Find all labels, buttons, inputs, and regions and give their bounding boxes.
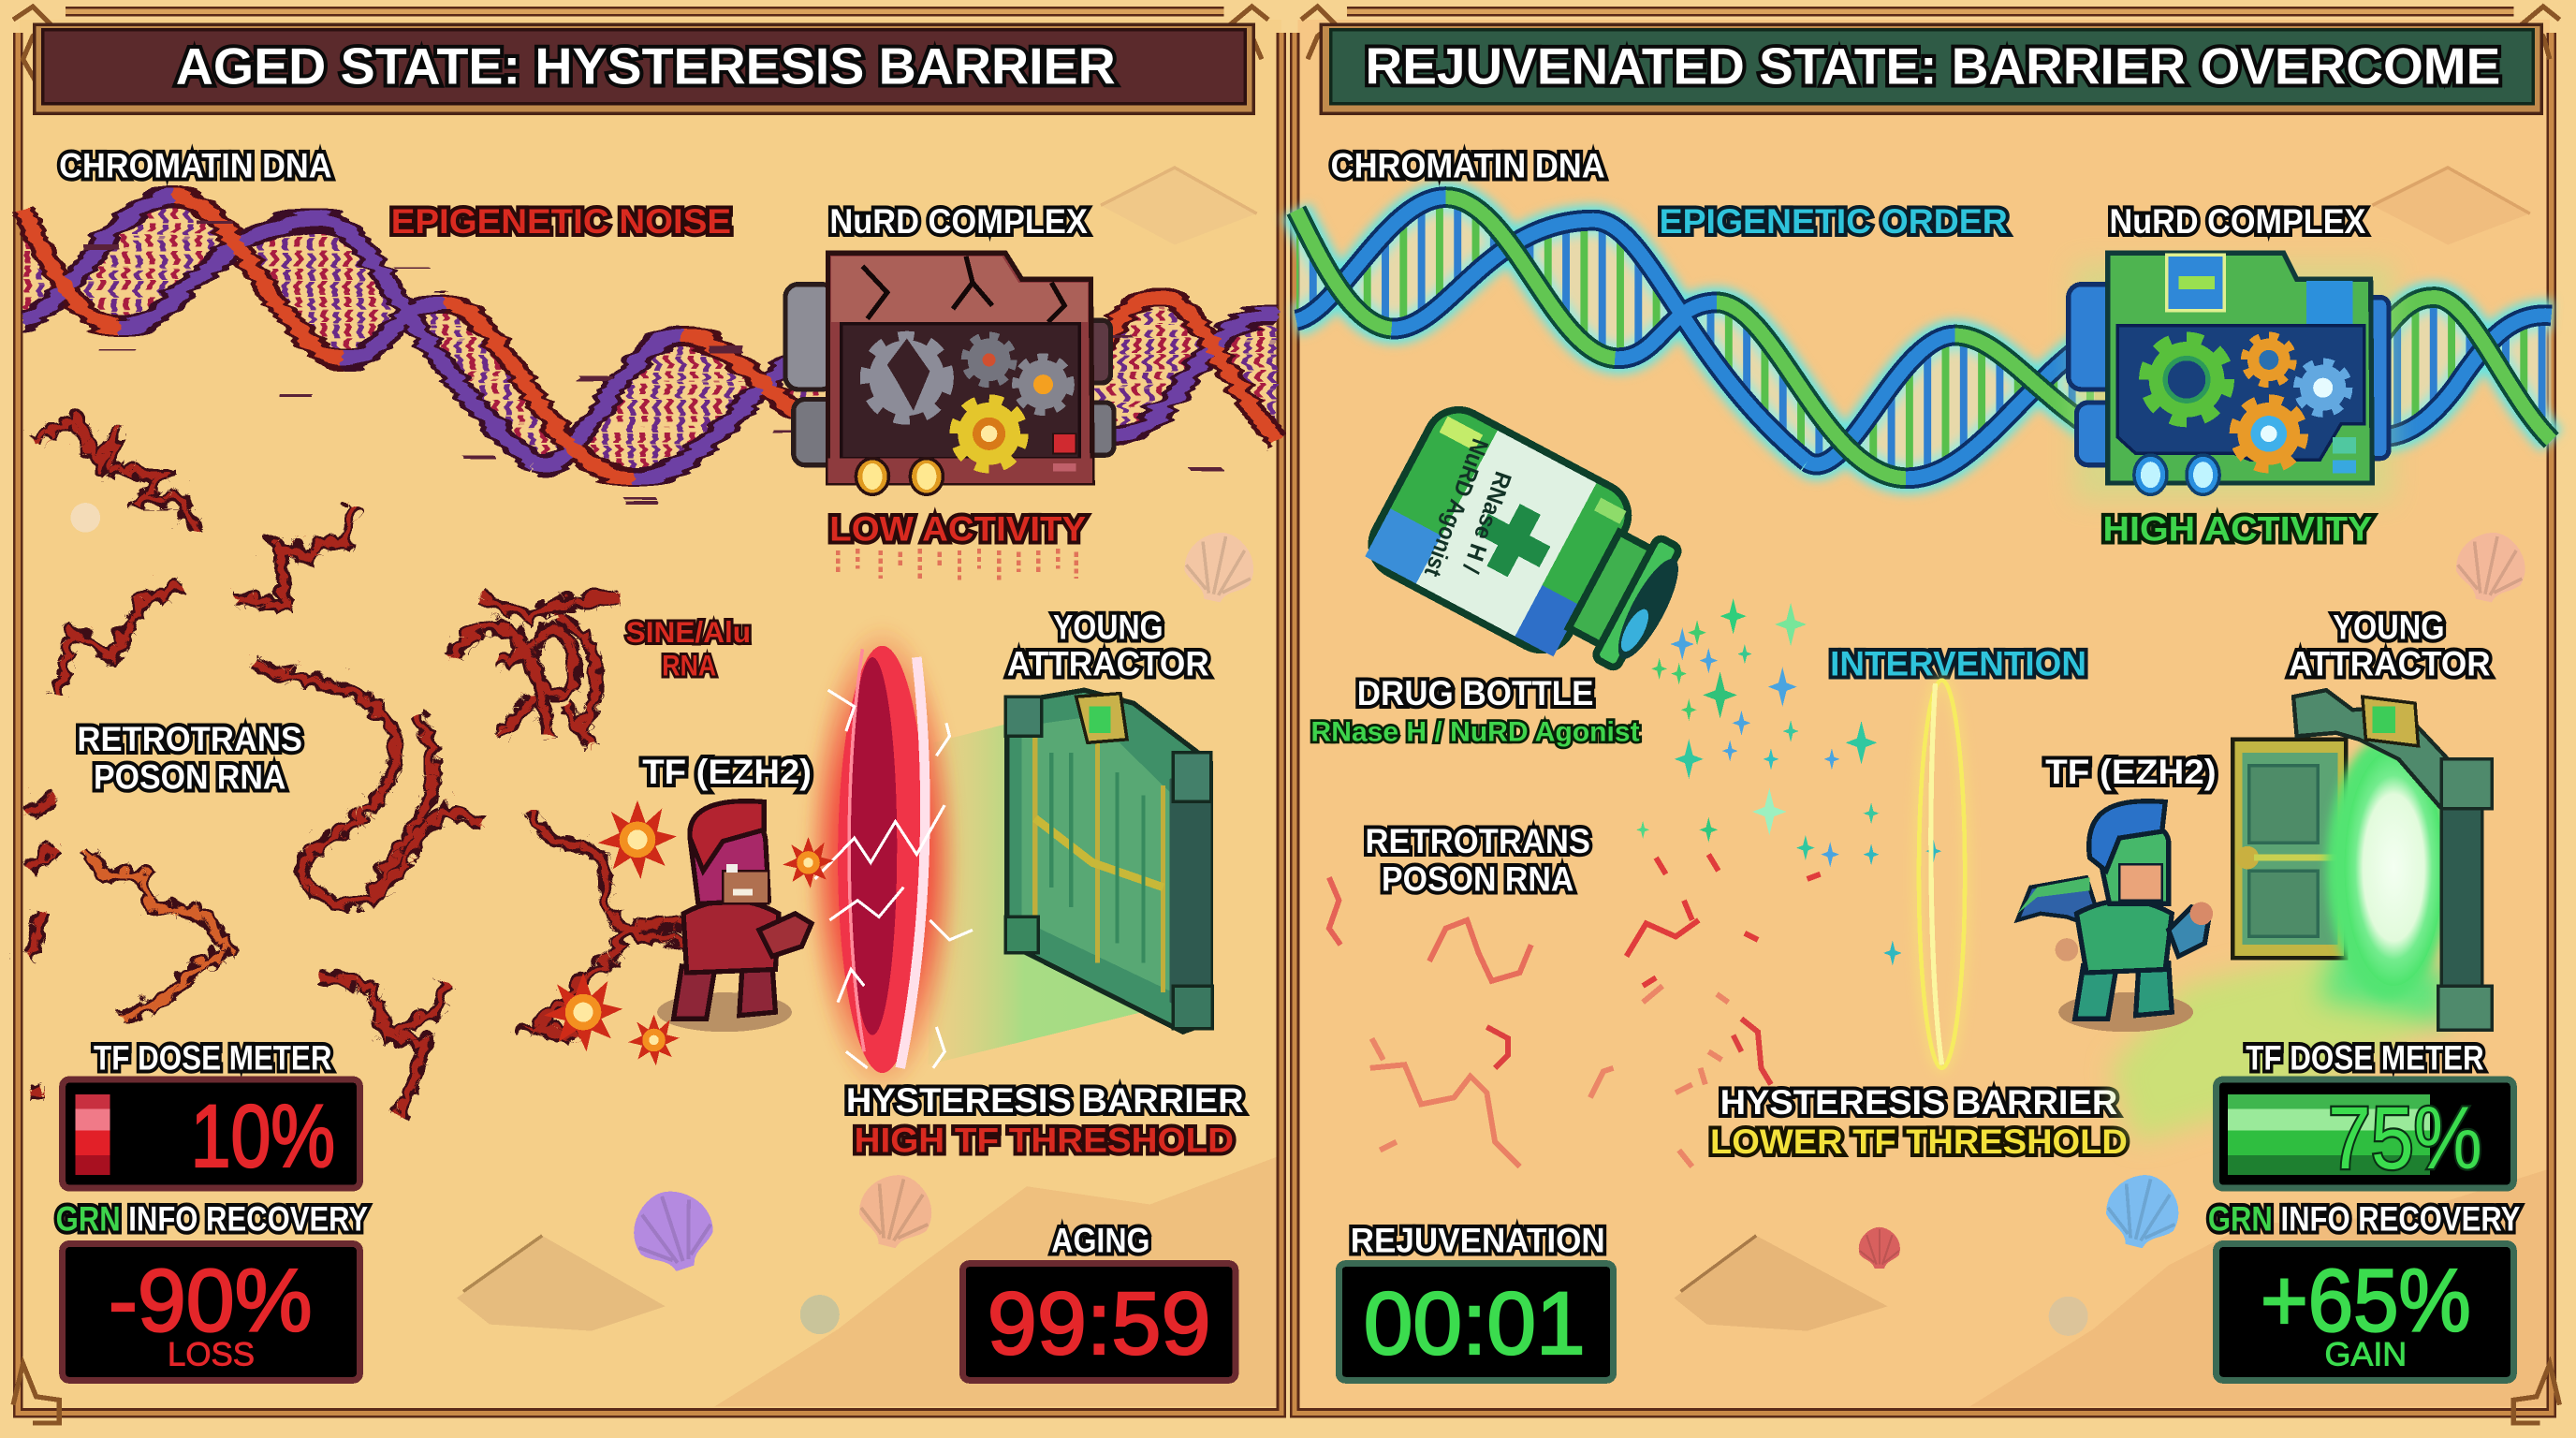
chart: rejuvenated chromatin DNA helix <box>1296 198 2552 478</box>
icon: fading RNA fragments <box>1329 855 1821 1167</box>
label: young attractor rejuvenated: YOUNG <box>2333 609 2445 647</box>
drips under label <box>838 549 1076 581</box>
label: hysteresis barrier rejuvenated <box>1710 1083 2128 1161</box>
gear: orange core <box>2236 401 2302 466</box>
label: drug bottle <box>1311 674 1640 748</box>
timer: rejuvenation 00:01 <box>1339 1264 1614 1380</box>
label: aging: AGING <box>1051 1221 1150 1259</box>
arch <box>2293 690 2448 809</box>
heading: aged state: AGED STATE: HYSTERESIS BARRIER <box>176 38 1116 95</box>
label: high activity: HIGH ACTIVITY <box>2103 509 2372 548</box>
gauge: GRN loss: -90% <box>109 1252 312 1351</box>
label: retrotransposon RNA rejuvenated <box>1365 822 1590 898</box>
label: young attractor aged: YOUNG <box>1053 609 1164 647</box>
sand shading lower right <box>1969 1168 2552 1406</box>
label: GRN info recovery aged: GRN INFO RECOVERY <box>56 1200 368 1239</box>
label: retrotransposon RNA aged: RETROTRANS <box>77 720 302 758</box>
label: chromatin DNA aged: CHROMATIN DNA <box>59 147 332 185</box>
label: bottle text <box>1419 435 1516 580</box>
gauge: TF dose 75 percent <box>2217 1079 2513 1188</box>
timer: aging 99:59: 99:59 <box>988 1274 1211 1373</box>
icon: healthy NuRD machine <box>2069 253 2393 501</box>
label: SINE/Alu RNA: RNA <box>662 648 716 682</box>
lamps <box>2134 455 2167 494</box>
gear: small <box>966 337 1012 383</box>
door leaf <box>2232 740 2346 958</box>
label: retrotransposon RNA aged <box>77 720 302 796</box>
dune: bottom <box>1674 1236 1888 1331</box>
icon: drug bottle <box>1360 399 1705 697</box>
gauge: GRN gain: +65% <box>2261 1252 2471 1351</box>
label: young attractor aged <box>1007 609 1209 682</box>
label: NuRD complex aged: NuRD COMPLEX <box>829 202 1088 241</box>
icon: intervention sparkles <box>1636 598 1941 965</box>
portal glow <box>2326 736 2452 999</box>
label: SINE/Alu RNA: SINE/Alu <box>626 615 751 649</box>
label: retrotransposon RNA aged: POSON RNA <box>94 757 285 796</box>
label: epigenetic order: EPIGENETIC ORDER <box>1660 202 2008 241</box>
heading: rejuvenated state: REJUVENATED STATE: BARRIER OVERCOME <box>1365 38 2500 95</box>
label: GRN info recovery rejuvenated: GRN INFO RECOVERY <box>2208 1200 2520 1239</box>
gauge: TF dose 75 percent: 75% <box>2328 1089 2482 1188</box>
panel: aged state background <box>0 0 1292 1438</box>
icon: hysteresis barrier yellow <box>1917 681 1967 1068</box>
label: hysteresis barrier rejuvenated: LOWER TF THRESHOLD <box>1710 1123 2128 1161</box>
label: TF dose meter rejuvenated: TF DOSE METER <box>2246 1039 2484 1078</box>
label: TF EZH2 aged: TF (EZH2) <box>642 753 812 791</box>
label: young attractor rejuvenated <box>2289 609 2491 682</box>
label: intervention: INTERVENTION <box>1830 644 2086 682</box>
dune: top right <box>1101 168 1257 245</box>
gear: glowing core <box>1017 359 1070 411</box>
gear: blue <box>2298 363 2348 413</box>
label: hysteresis barrier aged: HIGH TF THRESHOLD <box>855 1121 1234 1159</box>
label: SINE/Alu RNA <box>626 615 751 682</box>
glitch fragments <box>82 222 1224 501</box>
gauge: GRN gain <box>2217 1244 2513 1380</box>
label: bottle text: NuRD Agonist <box>1419 435 1493 580</box>
icon: closed young attractor door <box>1005 690 1212 1032</box>
timer: aging 99:59 <box>962 1264 1236 1380</box>
gear: orange small <box>2246 337 2291 383</box>
timer: rejuvenation 00:01: 00:01 <box>1364 1274 1586 1373</box>
gear: yellow <box>956 401 1022 466</box>
icon: aged TF warrior <box>657 801 812 1032</box>
label: chromatin DNA rejuvenated: CHROMATIN DNA <box>1331 147 1605 185</box>
label: retrotransposon RNA rejuvenated: RETROTRANS <box>1365 822 1590 860</box>
icon: rejuvenated TF warrior <box>2017 801 2213 1032</box>
label: drug bottle: DRUG BOTTLE <box>1357 674 1593 712</box>
label: young attractor aged: ATTRACTOR <box>1007 644 1209 682</box>
label: young attractor rejuvenated: ATTRACTOR <box>2289 644 2491 682</box>
panel: rejuvenated state background <box>1292 0 2576 1438</box>
label: retrotransposon RNA rejuvenated: POSON RNA <box>1382 859 1573 898</box>
cross <box>1466 492 1561 588</box>
label: TF dose meter aged: TF DOSE METER <box>94 1039 332 1078</box>
lamps <box>856 459 889 494</box>
label: TF EZH2 rejuvenated: TF (EZH2) <box>2045 753 2217 791</box>
sand shading lower right <box>714 1155 1281 1406</box>
label: NuRD complex rejuvenated: NuRD COMPLEX <box>2110 202 2366 241</box>
gear: broken <box>868 339 946 418</box>
gauge: GRN loss: LOSS <box>168 1336 255 1372</box>
gauge: TF dose 10 percent <box>63 1079 359 1188</box>
dune: top right <box>2372 168 2530 245</box>
label: low activity: LOW ACTIVITY <box>829 509 1086 548</box>
heading: aged state <box>35 24 1253 113</box>
label: bottle text: RNase H / <box>1457 468 1516 576</box>
label: hysteresis barrier rejuvenated: HYSTERESIS BARRIER <box>1720 1083 2117 1122</box>
icon: green floor light rejuvenated <box>2111 936 2448 1142</box>
gauge: GRN loss <box>63 1244 359 1380</box>
icon: damaged NuRD machine <box>785 253 1114 494</box>
gauge: TF dose 10 percent: 10% <box>191 1087 335 1186</box>
label: low activity <box>829 509 1086 581</box>
label: epigenetic noise: EPIGENETIC NOISE <box>391 202 731 241</box>
gauge: GRN gain: GAIN <box>2324 1336 2407 1372</box>
icon: green floor light aged <box>929 723 1142 1064</box>
label: rejuvenation: REJUVENATION <box>1351 1221 1605 1259</box>
icon: retrotransposon RNA tangle <box>23 413 690 1110</box>
label: hysteresis barrier aged <box>846 1081 1244 1159</box>
icon: open young attractor door <box>2232 690 2492 1030</box>
icon: aged sparks <box>544 800 834 1065</box>
label: drug bottle: RNase H / NuRD Agonist <box>1311 717 1640 748</box>
dune: bottom <box>457 1236 666 1331</box>
icon: seashells and pebbles aged <box>70 503 1260 1334</box>
lightning <box>815 690 973 1068</box>
gear: green <box>2147 340 2226 419</box>
label: hysteresis barrier aged: HYSTERESIS BARRIER <box>846 1081 1244 1120</box>
chart: aged chromatin DNA helix <box>23 198 1278 501</box>
icon: seashells and pebbles rejuvenated <box>1859 526 2532 1336</box>
heading: rejuvenated state <box>1321 24 2541 113</box>
icon: hysteresis barrier red <box>803 621 973 1097</box>
